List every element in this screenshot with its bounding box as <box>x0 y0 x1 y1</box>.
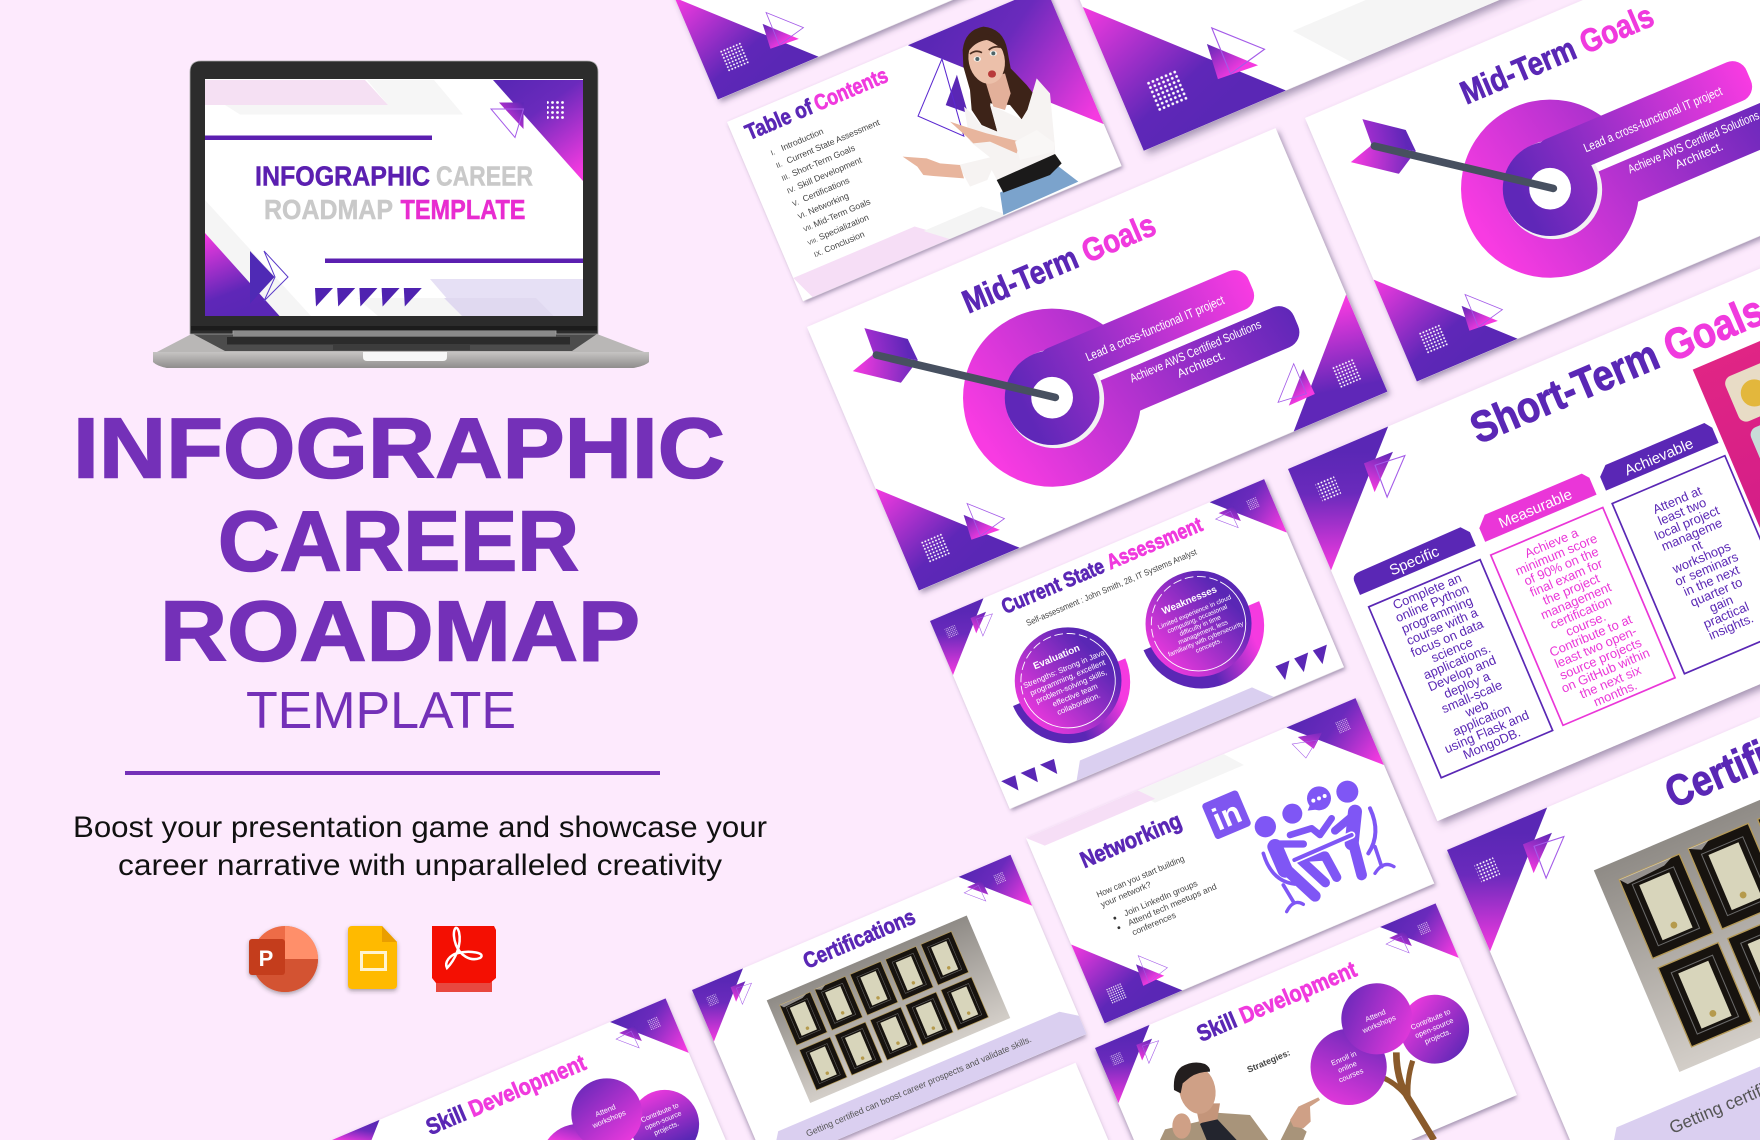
column: specific: Specific <box>1387 543 1442 579</box>
column: achievable: in the next <box>1681 562 1742 599</box>
column: achievable: insights. <box>1706 610 1756 643</box>
main title <box>73 402 725 680</box>
icon: arrow <box>839 270 1055 466</box>
evaluation circle: effective team <box>1051 682 1099 709</box>
weaknesses circle: concepts. <box>1195 637 1223 655</box>
laptop mockup <box>153 61 649 368</box>
slide: table of contents: Table of <box>741 94 817 145</box>
heading: Skill Development <box>422 1049 590 1140</box>
slide: networking <box>1026 698 1434 1023</box>
bubbles: projects. <box>1423 1027 1452 1046</box>
weaknesses circle: management, less <box>1177 619 1230 646</box>
column: achievable: or seminars <box>1672 549 1740 589</box>
column: specific: application <box>1450 701 1513 739</box>
slide: mid-term goals (right) <box>1305 0 1760 382</box>
slide: table of contents: Networking <box>806 190 850 217</box>
column: achievable: quarter to <box>1688 574 1745 610</box>
column: measurable: certification <box>1548 593 1614 632</box>
column: achievable: Achievable <box>1622 435 1696 479</box>
bubbles: Attend <box>1364 1007 1387 1024</box>
slide: table of contents: I. <box>769 147 777 157</box>
slide: table of contents <box>727 0 1122 301</box>
slide: table of contents: Certifications <box>801 175 852 204</box>
main title: INFOGRAPHIC <box>73 402 725 496</box>
column: specific: MongoDB. <box>1461 725 1523 762</box>
screen slide: CAREER <box>436 160 533 192</box>
column: measurable: on GitHub within <box>1559 645 1652 696</box>
lid bezel <box>190 61 598 334</box>
slide: table of contents: Short-Term Goals <box>790 142 857 178</box>
target key graphic: Achieve AWS Certified Solutions <box>1128 317 1263 385</box>
slide: table of contents: Skill Development <box>796 155 864 191</box>
slide: short-term goals <box>1288 203 1760 821</box>
slide: table of contents: III. <box>780 171 791 183</box>
bubbles: Contribute to <box>640 1102 680 1124</box>
slide: top middle decorative fragment <box>986 0 1760 151</box>
weaknesses circle: computing, occasional <box>1166 603 1229 635</box>
column: specific: applications. <box>1421 641 1493 682</box>
column: measurable: the next six <box>1577 662 1644 702</box>
description text: Boost your presentation game and showcase your <box>73 811 767 844</box>
column: specific: small-scale <box>1439 677 1504 716</box>
slide: skill development (right) <box>1095 903 1517 1140</box>
target key graphic: Lead a cross-functional IT project <box>1581 83 1725 155</box>
bubbles: open-source <box>644 1110 683 1132</box>
weaknesses circle <box>1122 550 1284 708</box>
icon: Adobe PDF <box>432 926 496 992</box>
bubbles <box>548 1078 699 1140</box>
footer band <box>1070 681 1274 781</box>
slide: top decorative fragment <box>606 0 1186 100</box>
description text <box>73 811 767 882</box>
heading: Networking <box>1076 807 1185 873</box>
subtitle: template: TEMPLATE <box>246 682 516 740</box>
target key graphic <box>1433 5 1760 305</box>
column: specific: using Flask and <box>1442 707 1531 756</box>
photo: surprised woman pointing left <box>903 27 1078 215</box>
screen slide: INFOGRAPHIC <box>255 160 430 192</box>
bubbles: open-source <box>1413 1016 1455 1040</box>
column: specific: web <box>1462 697 1491 720</box>
weaknesses circle: Weaknesses <box>1160 584 1219 617</box>
column: measurable: months. <box>1591 678 1639 709</box>
evaluation circle: Evaluation <box>1032 643 1082 672</box>
evaluation circle: problem-solving skills, <box>1034 667 1108 705</box>
thumb notch <box>363 352 447 361</box>
icon: PowerPoint <box>249 926 318 992</box>
heading: Mid-Term Goals <box>957 207 1161 320</box>
keyboard deck <box>193 334 597 351</box>
column: specific: Complete an <box>1390 570 1464 612</box>
heading: Current State Assessment <box>998 513 1206 619</box>
column: measurable: least two open- <box>1552 623 1639 671</box>
body text: Attend tech meetups and <box>1126 881 1218 928</box>
column: measurable: of 90% on the <box>1522 544 1601 589</box>
column: specific: deploy a <box>1441 668 1493 701</box>
slide: table of contents: VII. <box>803 223 814 234</box>
icon: meeting people <box>1255 781 1394 912</box>
column: measurable: the project <box>1540 570 1602 608</box>
bubbles: Enroll in <box>1330 1049 1358 1068</box>
slide: table of contents: Current State Assessment <box>785 117 882 166</box>
target key graphic: Architect. <box>1175 348 1227 381</box>
panel: food photo strip <box>1693 265 1760 660</box>
column: achievable: manageme <box>1659 515 1724 554</box>
column: measurable: management <box>1538 579 1614 622</box>
main title: CAREER <box>218 494 579 590</box>
triangles bottom right <box>1275 645 1333 681</box>
slide: table of contents: II. <box>775 159 784 170</box>
column: achievable: gain <box>1707 592 1735 615</box>
slide: table of contents: Introduction <box>779 126 825 153</box>
bubbles: Contribute to <box>1409 1007 1452 1032</box>
footer band <box>1614 1066 1760 1140</box>
slide: mid-term goals (centre) <box>807 128 1387 591</box>
icon: arrow <box>1337 61 1553 257</box>
slide: current state assessment <box>930 479 1344 809</box>
weaknesses circle: Limited experience in cloud <box>1157 594 1233 631</box>
footer band <box>776 1012 1086 1140</box>
slide: table of contents: Contents <box>810 62 892 116</box>
column: measurable: source projects <box>1557 635 1644 683</box>
body text: Join LinkedIn groups <box>1122 878 1199 918</box>
column: specific: programming <box>1399 593 1475 636</box>
screen slide: ROADMAP <box>264 194 393 225</box>
heading: Certifications <box>799 904 919 974</box>
footer caption: Getting certified can boost career prospects and validate skills. <box>805 1034 1033 1139</box>
evaluation circle <box>991 608 1149 762</box>
slide: certifications (small) <box>692 855 1086 1140</box>
column: measurable: course. <box>1563 609 1608 639</box>
tree <box>1377 1052 1434 1140</box>
column: specific <box>1351 525 1554 779</box>
column: measurable: Contribute to at <box>1547 611 1635 660</box>
bubbles: courses <box>1337 1066 1365 1085</box>
bubbles: projects. <box>653 1121 680 1137</box>
description text: career narrative with unparalleled creativity <box>118 849 722 882</box>
laptop base <box>153 334 649 368</box>
bubbles: workshops <box>590 1108 627 1130</box>
evaluation circle: Strengths: Strong in Java <box>1022 648 1107 690</box>
column: achievable: workshops <box>1669 539 1733 577</box>
column: achievable: Attend at <box>1650 483 1704 517</box>
column: specific: online Python <box>1393 581 1471 625</box>
evaluation circle: collaboration. <box>1056 691 1102 717</box>
icon: PowerPoint: P <box>259 946 273 971</box>
column: measurable: final exam for <box>1527 555 1605 600</box>
slide: table of contents: IX. <box>813 248 824 259</box>
slide: table of contents: VIII. <box>807 237 819 247</box>
icon: LinkedIn: in <box>1207 793 1247 838</box>
column: achievable: practical <box>1701 599 1751 631</box>
bubbles <box>1287 953 1482 1117</box>
body text: conferences <box>1130 910 1177 937</box>
column: achievable: nt <box>1689 537 1705 555</box>
photo: man pointing <box>1160 1062 1320 1140</box>
column: measurable <box>1475 471 1675 725</box>
column: specific: science <box>1429 634 1475 665</box>
slide: table of contents: Conclusion <box>823 229 866 255</box>
triangles bottom left <box>1001 759 1060 795</box>
weaknesses circle: difficulty in time <box>1179 614 1222 638</box>
column: measurable: Achieve a <box>1522 525 1581 561</box>
column: specific: Develop and <box>1426 652 1498 694</box>
target key graphic: Architect. <box>1673 139 1725 172</box>
slide: table of contents: Specialization <box>817 212 870 242</box>
screen slide <box>205 79 583 316</box>
column: measurable: Measurable <box>1496 486 1575 532</box>
icon: Google Slides <box>348 926 397 989</box>
photo: framed certificates <box>1594 704 1760 1072</box>
label: Strategies: <box>1246 1048 1292 1075</box>
body text <box>1095 846 1222 944</box>
divider line <box>125 771 660 775</box>
column: achievable: least two <box>1656 495 1708 528</box>
slide: certifications (large) <box>1447 633 1760 1140</box>
front lip <box>153 352 649 368</box>
slide: table of contents: IV. <box>786 184 797 196</box>
slide: table of contents: V. <box>791 198 800 208</box>
body text: How can you start building <box>1095 853 1186 900</box>
slide: blank fragment at bottom <box>894 1063 1108 1140</box>
column: achievable: local project <box>1652 502 1722 543</box>
photo: framed certificates <box>767 915 1010 1103</box>
slide: table of contents: Mid-Term Goals <box>812 196 873 229</box>
column: achievable <box>1597 421 1760 674</box>
weaknesses circle: familiarity with cybersecurity <box>1167 620 1245 659</box>
bubbles: online <box>1337 1059 1358 1075</box>
column: specific: focus on data <box>1408 616 1486 660</box>
bubbles: Attend <box>594 1102 617 1119</box>
icon: LinkedIn <box>1201 789 1252 840</box>
evaluation circle: programming, excellent <box>1029 657 1107 698</box>
screen slide: TEMPLATE <box>400 194 526 225</box>
column: measurable: minimum score <box>1513 531 1599 579</box>
body text: your network? <box>1099 879 1153 909</box>
bubbles: workshops <box>1360 1013 1397 1035</box>
subtitle: Self-assessment : John Smith, 28, IT Systems Analyst <box>1024 546 1199 628</box>
slide: skill development (left) <box>332 998 726 1140</box>
main title: ROADMAP <box>160 584 640 680</box>
target key graphic: Lead a cross-functional IT project <box>1083 292 1227 364</box>
target key graphic <box>935 214 1326 514</box>
slide: table of contents: VI. <box>796 209 808 221</box>
column: specific: course with a <box>1404 604 1481 648</box>
heading: Skill Development <box>1193 956 1361 1047</box>
